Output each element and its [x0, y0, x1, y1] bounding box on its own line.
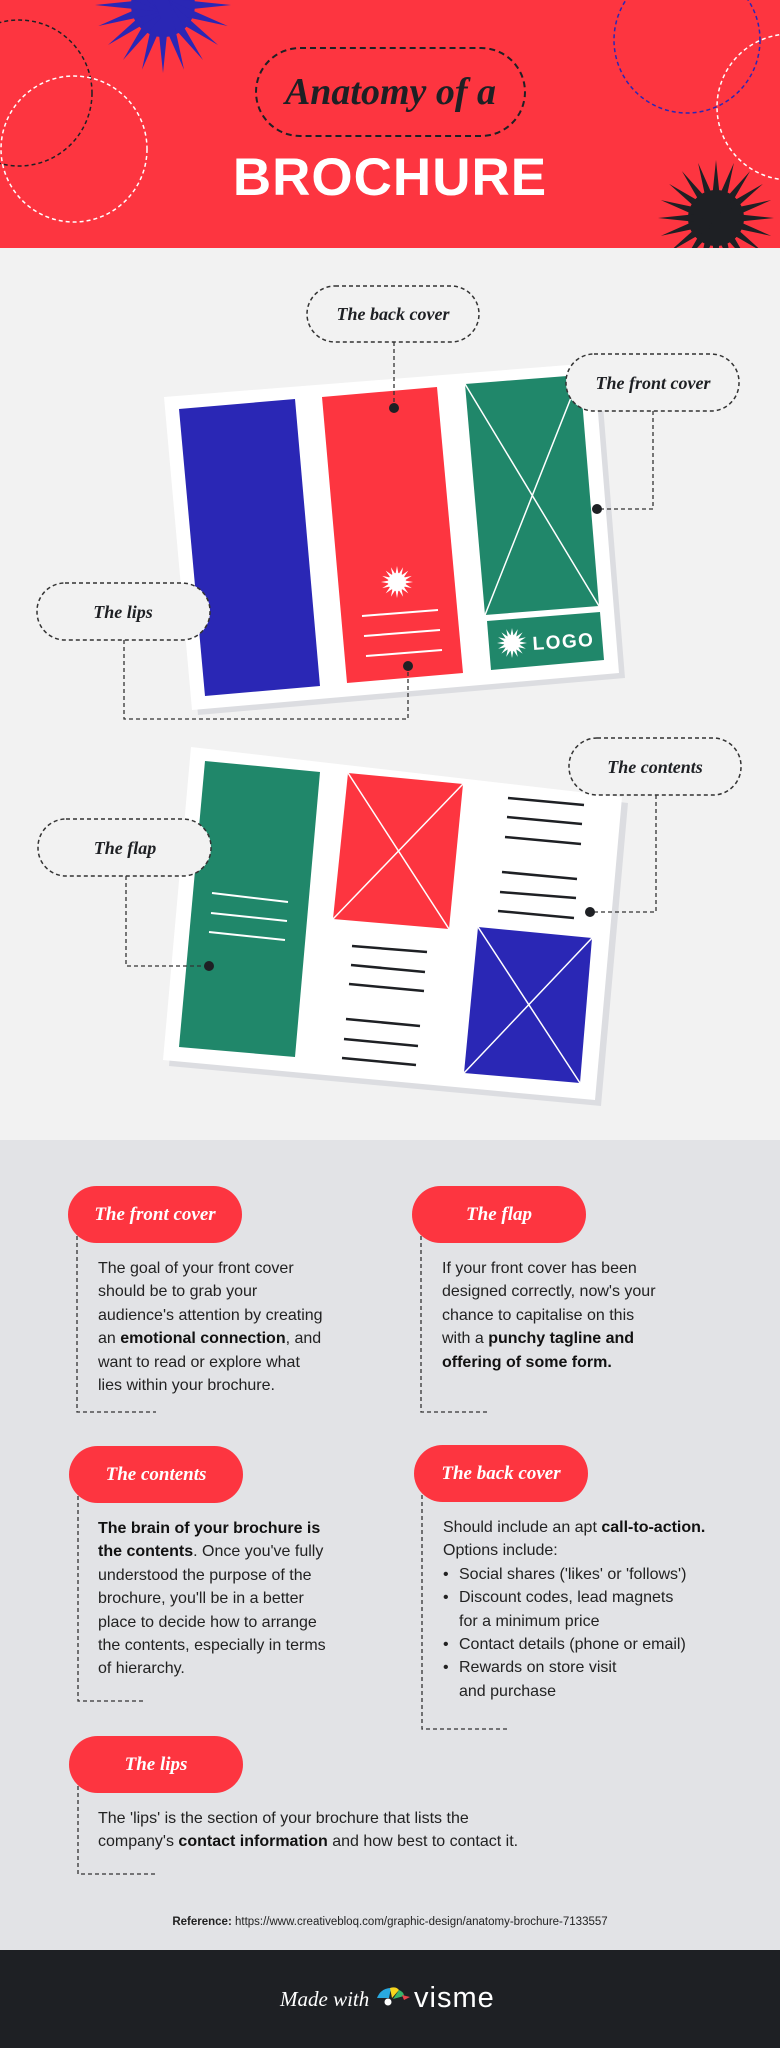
text: back cover: •: [443, 1636, 449, 1653]
text: flap: offering of some form.: [442, 1354, 612, 1371]
decoration: dashed circles: [0, 0, 780, 222]
text: front cover: lies within your brochure.: [98, 1377, 275, 1394]
label: The front cover: [566, 354, 739, 411]
pill: The contents: The contents: [106, 1464, 206, 1484]
pill: The front cover: [68, 1186, 242, 1243]
pill: The flap: The flap: [466, 1204, 532, 1224]
label: The back cover: [307, 286, 479, 342]
footer text: Made with: Made with: [280, 1987, 369, 2011]
label: The lips: The lips: [93, 602, 153, 622]
text: back cover: •: [443, 1659, 449, 1676]
connectors brochure 2: [126, 795, 656, 966]
label: The flap: The flap: [94, 838, 156, 858]
title pill: Anatomy of a: Anatomy of a: [285, 71, 496, 113]
pill: The contents: [69, 1446, 243, 1503]
text: contents: of hierarchy.: [98, 1660, 185, 1677]
pill: The flap: [412, 1186, 586, 1243]
icon: black starburst: [658, 160, 774, 276]
text: back cover: for a minimum price: [459, 1613, 599, 1630]
pill: The lips: [69, 1736, 243, 1793]
pill: The lips: The lips: [125, 1754, 187, 1774]
text: front cover: [98, 1260, 323, 1394]
text: flap: If your front cover has been: [442, 1260, 637, 1277]
text: contents: place to decide how to arrange: [98, 1614, 317, 1631]
pill: The back cover: [414, 1445, 588, 1502]
text: flap: with a punchy tagline and: [442, 1330, 634, 1347]
diagram: brochure inside: [163, 747, 628, 1106]
footer: [0, 1950, 780, 2048]
text: back cover: •: [443, 1589, 449, 1606]
pill: The front cover: The front cover: [94, 1204, 216, 1224]
text: back cover: Options include:: [443, 1542, 558, 1559]
pill: The back cover: The back cover: [441, 1462, 561, 1484]
icon: visme logo: [377, 1987, 410, 2006]
text: front cover: want to read or explore what: [98, 1354, 300, 1371]
text: contents: [98, 1520, 326, 1677]
title: BROCHURE: BROCHURE: [233, 148, 547, 207]
text: back cover: Rewards on store visit: [459, 1659, 616, 1676]
panel: contents: [333, 773, 592, 1083]
label: The flap: [38, 819, 211, 876]
text: contents: The brain of your brochure is: [98, 1520, 320, 1537]
panel: front cover (green): [465, 375, 604, 670]
label: The lips: [37, 583, 210, 640]
text: flap: designed correctly, now's your: [442, 1283, 656, 1300]
title pill: Anatomy of a: [255, 47, 526, 137]
label: The contents: [569, 738, 741, 795]
text: lips: The 'lips' is the section of your brochure that lists the: [98, 1810, 469, 1827]
text: front cover: The goal of your front cover: [98, 1260, 294, 1277]
text: back cover: and purchase: [459, 1683, 556, 1700]
label: The back cover: The back cover: [337, 304, 450, 324]
label: The contents: The contents: [607, 757, 703, 777]
text: back cover: Contact details (phone or email): [459, 1636, 686, 1653]
text: front cover: should be to grab your: [98, 1283, 257, 1300]
text: contents: brochure, you'll be in a better: [98, 1590, 304, 1607]
panel: flap (green): [179, 761, 320, 1057]
label: The front cover: The front cover: [596, 373, 711, 393]
diagram: brochure outside: [164, 363, 625, 715]
text: lips: company's contact information and how best to contact it.: [98, 1833, 518, 1850]
text: contents: understood the purpose of the: [98, 1567, 312, 1584]
text: front cover: audience's attention by creating: [98, 1307, 323, 1324]
text: lips: [98, 1810, 518, 1850]
text: contents: the contents, especially in terms: [98, 1637, 326, 1654]
text: back cover: •: [443, 1566, 449, 1583]
text: contents: the contents. Once you've fully: [98, 1543, 323, 1560]
text: flap: chance to capitalise on this: [442, 1307, 634, 1324]
text section background: [0, 1140, 780, 1950]
header band: [0, 0, 780, 248]
icon: blue starburst: [95, 0, 231, 73]
panel: back cover (red): [322, 387, 463, 683]
connectors brochure 1: [124, 342, 653, 719]
text: back cover: [443, 1519, 705, 1700]
reference line: Reference: https://www.creativebloq.com/graphic-design/anatomy-brochure-7133557: [172, 1916, 608, 1928]
text: back cover: Social shares ('likes' or 'follows'): [459, 1566, 686, 1583]
text: back cover: Discount codes, lead magnets: [459, 1589, 673, 1606]
footer text: visme: visme: [414, 1982, 495, 2014]
text: flap: [442, 1260, 656, 1371]
text: front cover: an emotional connection, and: [98, 1330, 321, 1347]
text: back cover: Should include an apt call-to-action.: [443, 1519, 705, 1536]
diagrams: [36, 285, 742, 1106]
panel: front cover (green): LOGO: [532, 630, 595, 655]
